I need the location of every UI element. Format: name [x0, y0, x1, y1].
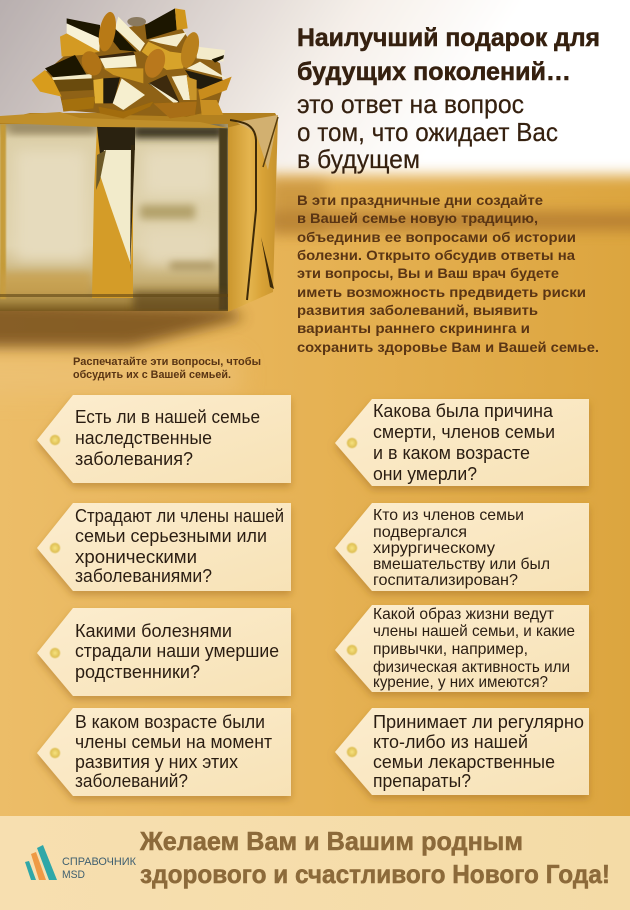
logo: MSD: [62, 869, 85, 881]
tag: cause of death: они умерли?: [373, 464, 477, 484]
ribbon: [92, 126, 133, 298]
tag: hereditary diseases: наследственные: [75, 428, 212, 448]
tag: surgery: хирургическому: [373, 540, 495, 557]
heading bold: будущих поколений…: [297, 58, 571, 86]
intro text: сохранить здоровье Вам и Вашей семье.: [297, 339, 599, 355]
tag: chronic diseases: Страдают ли члены нашей: [75, 506, 284, 526]
box front: [0, 124, 228, 312]
tag: hereditary diseases: заболевания?: [75, 449, 193, 469]
intro text: развития заболеваний, выявить: [297, 302, 538, 318]
tag: deceased relatives: Какими болезнями: [75, 621, 232, 641]
tag: age of onset: В каком возрасте были: [75, 712, 265, 732]
tag: age of onset: [37, 708, 291, 796]
intro text: в Вашей семье новую традицию,: [297, 210, 538, 226]
footer band: [0, 816, 630, 910]
tag: surgery: подвергался: [373, 524, 467, 541]
tag: medication: кто-либо из нашей: [373, 732, 528, 752]
print note: обсудить их с Вашей семьей.: [73, 369, 231, 381]
subheading: о том, что ожидает Вас: [297, 117, 558, 147]
tag: age of onset: развития у них этих: [75, 752, 238, 772]
tag: lifestyle: физическая активность или: [373, 659, 570, 676]
tag: deceased relatives: страдали наши умершие: [75, 641, 279, 661]
logo: СПРАВОЧНИК: [62, 856, 137, 868]
subheading: в будущем: [297, 144, 420, 174]
tag: lifestyle: члены нашей семьи, и какие: [373, 623, 575, 640]
intro text: иметь возможность предвидеть риски: [297, 284, 586, 300]
tag: surgery: Кто из членов семьи: [373, 507, 524, 524]
tag: medication: Принимает ли регулярно: [373, 712, 584, 732]
tag: medication: семьи лекарственные: [373, 752, 555, 772]
tag: hereditary diseases: [37, 395, 291, 483]
tag: age of onset: члены семьи на момент: [75, 732, 272, 752]
greeting: Желаем Вам и Вашим родным: [139, 826, 523, 856]
intro text: объединив ее вопросами об истории: [297, 229, 576, 245]
tag: lifestyle: [335, 605, 589, 692]
heading bold: [297, 24, 600, 86]
print note: [73, 356, 261, 381]
tag: deceased relatives: [37, 608, 291, 696]
greeting: здорового и счастливого Нового Года!: [140, 859, 610, 889]
title: [297, 24, 600, 174]
tag: surgery: [335, 503, 589, 591]
tag: age of onset: заболеваний?: [75, 771, 188, 791]
tag: cause of death: [335, 399, 589, 486]
greeting: [139, 826, 610, 889]
tag: chronic diseases: семьи серьезными или: [75, 526, 267, 546]
intro text: эти вопросы, Вы и Ваш врач будете: [297, 265, 559, 281]
box side: [226, 115, 278, 312]
intro text: болезни. Открыто обсудив ответы на: [297, 247, 575, 263]
intro text: В эти праздничные дни создайте: [297, 192, 543, 208]
tag: cause of death: Какова была причина: [373, 401, 554, 421]
tag: surgery: вмешательству или был: [373, 556, 550, 573]
box strap: [0, 112, 228, 128]
gift box: [0, 8, 278, 312]
intro text: [297, 192, 599, 355]
subheading: [297, 89, 558, 174]
tag: lifestyle: привычки, например,: [373, 641, 528, 658]
tag: hereditary diseases: Есть ли в нашей семье: [75, 407, 260, 427]
box top: [0, 113, 278, 130]
tag: medication: [335, 708, 589, 795]
tag: deceased relatives: родственники?: [75, 662, 200, 682]
print note: Распечатайте эти вопросы, чтобы: [73, 356, 261, 368]
tag: medication: препараты?: [373, 771, 471, 791]
tag: lifestyle: Какой образ жизни ведут: [373, 606, 555, 623]
intro text: варианты раннего скрининга и: [297, 320, 530, 336]
tag: chronic diseases: [37, 503, 291, 591]
tag: surgery: госпитализирован?: [373, 572, 518, 589]
tag: cause of death: и в каком возрасте: [373, 443, 530, 463]
subheading: это ответ на вопрос: [297, 89, 524, 119]
tag: lifestyle: курение, у них имеются?: [373, 674, 548, 691]
heading bold: Наилучший подарок для: [297, 24, 600, 52]
tag: chronic diseases: хроническими: [75, 547, 197, 567]
tag: chronic diseases: заболеваниями?: [75, 566, 212, 586]
tag: cause of death: смерти, членов семьи: [373, 422, 555, 442]
bow: [32, 8, 232, 118]
logo: [25, 845, 137, 881]
